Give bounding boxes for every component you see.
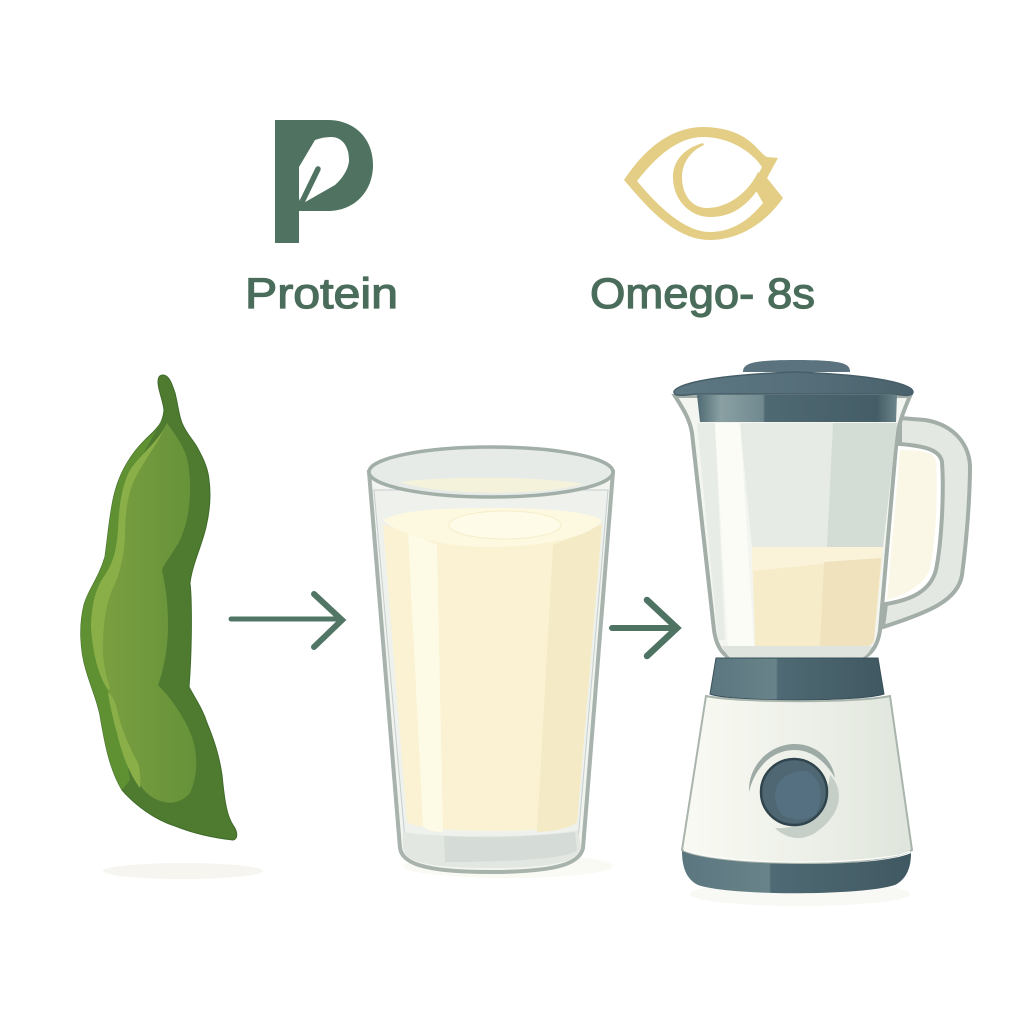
collar band (697, 395, 897, 422)
jar upper interior (740, 423, 897, 548)
knob highlight (775, 771, 821, 820)
knob (761, 759, 827, 825)
label: Protein: Protein (245, 270, 398, 318)
icon: protein leaf P (275, 120, 373, 243)
milk seen through rim (400, 478, 583, 493)
knob swoosh (749, 744, 835, 792)
pod left strip (81, 418, 163, 790)
glass body (369, 472, 613, 872)
glass base band (444, 832, 577, 862)
pod lower highlight (108, 693, 140, 788)
milk shade right (537, 524, 602, 832)
jar liquid right shade (820, 558, 881, 647)
milk (383, 524, 602, 831)
shadow: pod (103, 863, 263, 879)
shadow: blender (690, 882, 910, 906)
glass inner wall (374, 490, 608, 840)
jar (675, 396, 910, 658)
icon: omega eye (624, 127, 783, 240)
glass of soy milk (369, 447, 613, 872)
glass rim (369, 447, 613, 497)
base body (682, 696, 912, 864)
jar left wall tint (697, 423, 725, 640)
lid (674, 372, 913, 395)
milk highlight left (408, 532, 443, 832)
handle inner fill (887, 450, 937, 600)
foot edge line (684, 850, 910, 862)
arrow: glass to blender (612, 600, 677, 656)
shadow: glass (403, 854, 613, 878)
jar liquid top band (752, 547, 883, 571)
jar liquid (752, 547, 883, 647)
arrow: pod to glass (231, 594, 342, 647)
base collar (710, 658, 884, 700)
blender (674, 360, 970, 893)
jar left highlight (715, 423, 754, 647)
handle (883, 418, 970, 627)
pod outer shell (81, 375, 237, 840)
soybean pod (81, 375, 237, 840)
pod seeds body (91, 423, 196, 803)
glass base (403, 830, 581, 868)
label: Omego- 8s: Omego- 8s (590, 270, 815, 318)
knob shadow (775, 775, 839, 838)
base foot (682, 851, 911, 893)
lid knob (743, 360, 850, 372)
pod upper highlight (91, 423, 167, 690)
jar interior right shade (827, 423, 897, 547)
milk surface (383, 508, 602, 547)
jar base glass (722, 646, 872, 658)
milk surface swirl (449, 511, 561, 539)
